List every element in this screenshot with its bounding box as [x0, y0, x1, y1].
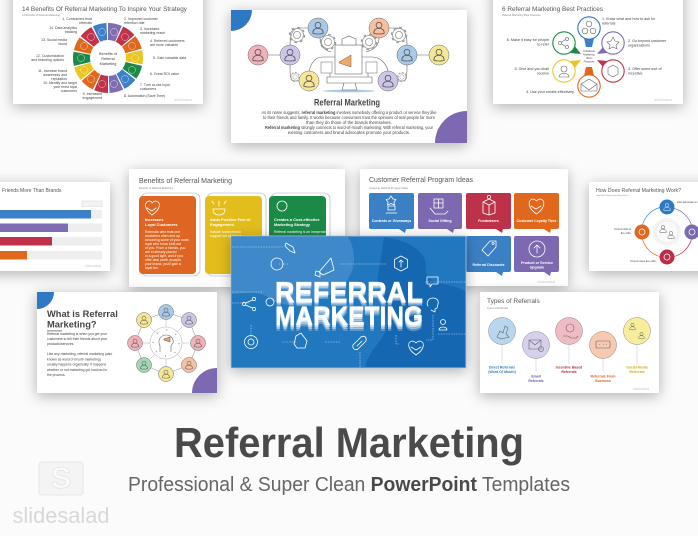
cover title: REFERRAL [275, 277, 423, 309]
logo wordmark: slidesalad [12, 503, 110, 528]
cover title: REFERRAL [275, 278, 423, 310]
wheel labels: reputation [51, 77, 67, 81]
card: loyal customers: Referrals who trust one [145, 230, 180, 234]
slide: 14 benefits wheel: Referral [101, 57, 115, 61]
card: loyal customers: in a good light, and if you [145, 254, 183, 258]
type: direct referrals: Direct Referrals [489, 366, 515, 370]
slide heading: benefits: Benefits of Referral Marketing [139, 176, 232, 185]
card: cost effective: Creates a Cost-effective [274, 217, 320, 222]
slidesalad logo [12, 462, 110, 528]
corner: blue [231, 10, 252, 31]
process labels: the offer [621, 231, 631, 235]
slide heading: 14 benefits: 14 Benefits Of Referral Marketing To Inspire Your Strategy [22, 6, 188, 13]
connector lines [268, 28, 429, 81]
practice labels: receive [537, 72, 549, 76]
idea card: product upgrade: Product or Service [521, 261, 553, 265]
slide: what is referral marketing: Marketing? [47, 320, 97, 330]
practice labels: to refer [537, 42, 550, 46]
idea card: social gifting: Social Gifting [428, 219, 452, 223]
wheel labels: 6. Great ROI value [150, 72, 179, 76]
legend button [82, 201, 102, 206]
type: incentive based referrals: Referrals [561, 370, 577, 374]
slide footer logo: slidesalad [174, 97, 192, 102]
icon: megaphone [315, 258, 334, 277]
card: positive feel of engagement: Adds Positive Feel of [210, 217, 251, 222]
practice labels: 6. Make it easy for people [507, 38, 549, 42]
type: direct referrals: (Word Of Mouth) [488, 370, 516, 374]
practice labels: 1. Know what and how to ask for [602, 17, 656, 21]
central people icon [653, 218, 681, 246]
slide: customer referral program ideas: Customer Referral Program Ideas [369, 186, 409, 190]
wheel labels: referrals [79, 21, 92, 25]
idea card: customer loyalty tiers [514, 193, 559, 233]
stem lines [502, 344, 637, 372]
wheel labels: 13. Social media [41, 38, 67, 42]
wheel labels: are more valuable [150, 43, 178, 47]
body text: Referral marketing strongly connects to word-of-mouth marketing. With referral marketing, your [265, 125, 434, 130]
icon: small gear [266, 298, 274, 306]
body text: usually happens organically. It happens [47, 362, 106, 366]
practice labels: incentive [628, 72, 643, 76]
idea card: fundraisers: Fundraisers [478, 219, 499, 223]
slide: 6 best practices: Practices [584, 60, 595, 64]
wheel labels: marketing reach [140, 31, 165, 35]
idea card: referral discounts: Referral Discounts [473, 263, 504, 267]
wheel labels: boost [58, 42, 67, 46]
cover icon network [232, 243, 466, 368]
slide: friends more than brands bar chart [0, 182, 110, 271]
wheel labels: customers [140, 87, 156, 91]
wheel labels: awareness and [43, 73, 67, 77]
body text [47, 332, 112, 377]
wheel labels: 10. Identify and target [43, 81, 77, 85]
card: positive feel of engagement: Include social media [210, 230, 241, 234]
card: loyal customers: loyal fan. [145, 266, 159, 270]
icon: sparkling bowl [212, 201, 226, 215]
corner: purple [435, 111, 467, 143]
body text: As its name suggests, referral marketing involves somebody offering a product or service they like [262, 110, 437, 115]
benefits wheel [71, 21, 145, 95]
main title: Referral Marketing [174, 419, 524, 466]
icon: hands [294, 333, 307, 348]
card: loyal customers [139, 196, 196, 274]
slide: 14 benefits wheel: Marketing [100, 62, 116, 66]
wheel labels: 5. Gain valuable data [153, 56, 186, 60]
wheel labels: 2. Improved customer [124, 17, 159, 21]
body text: existing customers and brand advocates promote your products. [288, 130, 410, 135]
wheel centre label: Benefits of [99, 52, 118, 56]
bars [0, 210, 91, 260]
wheel labels: retention rate [124, 21, 145, 25]
icon: head gear [271, 258, 283, 270]
type: social media referrals: Referrals [629, 370, 645, 374]
cover title: MARKETING [275, 303, 423, 333]
type: incentive based referrals: Incentive Based [556, 366, 582, 370]
icon: hand coin [277, 201, 287, 211]
icon: open box [394, 256, 408, 271]
process labels: Friend claims [614, 227, 632, 231]
network ring [135, 312, 198, 374]
slide: how does referral marketing work [589, 182, 698, 271]
cover title: MARKETING [275, 301, 423, 331]
wheel labels: 11. Increase brand [38, 69, 67, 73]
type: social media referrals: Social Media [626, 366, 648, 370]
card: loyal customers: Loyal Customers [145, 222, 178, 227]
card: loyal customers: your brand, you'll gain a [145, 262, 181, 266]
slide: benefits of referral marketing cards: Benefits of Referral Marketing [139, 186, 174, 190]
body text: Like any marketing, referral marketing (also [47, 352, 112, 356]
people icons [253, 22, 444, 87]
card outlines [141, 193, 330, 276]
wheel labels: 7. Turn at-risk loyal [140, 83, 170, 87]
slide heading: how: How Does Referral Marketing Work? [596, 188, 681, 194]
body text: products/services. [47, 342, 74, 346]
slide: 14 benefits wheel [13, 0, 203, 104]
practice icons [558, 21, 619, 91]
centre hub [580, 48, 598, 66]
spokes [143, 320, 189, 366]
slide: 6 best practices: Marketing [583, 52, 595, 56]
type: referrals from business: Referrals From [591, 374, 615, 378]
centre cover slide [231, 236, 466, 368]
wheel labels: tracking [65, 30, 77, 34]
wheel labels: customers [61, 89, 77, 93]
slide footer logo: slidesalad [537, 279, 555, 284]
network people icons [131, 308, 202, 378]
practice wedges [570, 38, 607, 76]
icon: person [440, 320, 446, 324]
wheel segment glyphs [78, 28, 138, 88]
card: loyal customers: offer deal worth accepts [145, 258, 181, 262]
type: email referrals [522, 332, 550, 383]
idea card: product upgrade: Upgrade [530, 266, 544, 270]
slide heading: referral marketing: Referral Marketing [314, 98, 380, 108]
icon: share [242, 302, 246, 306]
practice labels: 2. Go beyond customer [628, 39, 667, 43]
body text: to their friends and family. It works because consumers trust the opinions of real people far more [263, 115, 436, 120]
practice labels [507, 17, 667, 94]
cover title [275, 277, 423, 337]
card: positive feel of engagement: support out of strong [210, 234, 241, 238]
type: referrals from business [590, 332, 616, 383]
slide: types of referrals [480, 292, 659, 393]
wheel labels: and branding options [31, 58, 64, 62]
slide heading: what is: What is Referral [47, 309, 118, 319]
idea card: product upgrade [514, 236, 559, 276]
slide footer logo: slidesalad [85, 264, 101, 268]
body text: known as word of mouth marketing) [47, 358, 101, 362]
wheel labels: 14. Data analytics [49, 26, 77, 30]
idea card: fundraisers [466, 193, 511, 233]
card: loyal customers: marketers often end up [145, 234, 180, 238]
type: email referrals: Email [531, 374, 541, 378]
process nodes [634, 200, 698, 264]
slide: referral marketing network [231, 10, 467, 143]
idea card: contests [369, 193, 414, 233]
cover background blobs [232, 237, 465, 367]
idea card: contests: Contests or Giveaways [372, 219, 411, 223]
card: loyal customers: loyal who know best out [145, 242, 181, 246]
card: loyal customers: are in already placed [145, 250, 177, 254]
gears [289, 27, 407, 82]
logo mark [39, 462, 83, 495]
slide footer logo: slidesalad [654, 97, 672, 102]
icon: target [244, 336, 258, 348]
card: cost effective [269, 196, 329, 274]
corner: blue [37, 292, 54, 309]
card: loyal customers: becoming some of your most [145, 238, 189, 242]
body text: whether or not marketing got involved in [47, 368, 107, 372]
card: cost effective: Marketing Strategy [274, 222, 311, 227]
slide: 6 best practices: Best [586, 56, 592, 60]
cover title: REFERRAL [275, 280, 423, 312]
type: social media referrals [624, 318, 650, 374]
icon: heart handshake [409, 341, 423, 355]
slide: how does referral marketing work: How Does Referral Marketing Work? [596, 194, 629, 197]
idea card: customer loyalty tiers: Customer Loyalty Tiers [517, 219, 556, 223]
icon: chat bubble [427, 277, 438, 287]
wheel labels: 8. Automation (Save Time) [124, 94, 165, 98]
body text: the process. [47, 373, 66, 377]
idea card: social gifting [418, 193, 462, 233]
slide heading: program ideas: Customer Referral Program Ideas [369, 175, 473, 184]
wheel labels: engagement [83, 96, 102, 100]
body text: customers to tell their friends about your [47, 337, 108, 341]
wheel labels: 12. Customization [36, 54, 64, 58]
card: loyal customers: Increases [145, 217, 164, 222]
wheel labels [31, 17, 186, 100]
practice labels: organizations [628, 44, 650, 48]
wheel labels: your most loyal [53, 85, 77, 89]
network people [248, 18, 449, 91]
practice circles [553, 17, 624, 97]
cover title: REFERRAL [275, 281, 423, 313]
icon: heart handshake [146, 201, 159, 215]
icon: chain link [353, 336, 366, 350]
body text: than they do those of the brands themselves. [306, 120, 392, 125]
icon: medal [285, 243, 295, 253]
megaphone head icon [159, 335, 173, 352]
card: loyal customers: of you. From a friends, you [145, 246, 185, 250]
type: email referrals: Referrals [528, 379, 544, 383]
slide: 6 best practices: Referral Marketing Best Practices [502, 13, 541, 17]
slide heading: friends: Friends More Than Brands [2, 188, 62, 194]
slidesalad logo: S [51, 462, 71, 495]
monitor with megaphone [321, 36, 377, 92]
network nodes [128, 304, 206, 382]
corner: purple [192, 368, 217, 393]
wheel labels: 4. Referred customers [150, 39, 185, 43]
slide heading: best practices: 6 Referral Marketing Best Practices [502, 6, 604, 13]
subtitle: Professional & Super Clean PowerPoint Templates [128, 474, 570, 496]
practice labels: 5. Give and you shall [515, 67, 549, 71]
wheel labels: 9. Increased [83, 92, 102, 96]
practice labels: referrals [602, 22, 616, 26]
wheel labels: 1. Consumers trust [62, 17, 92, 21]
card: cost effective: Referral marketing is an inexpensive [274, 230, 329, 234]
type: referrals from business: Business [595, 379, 611, 383]
cover title: MARKETING [275, 305, 423, 335]
body text: Referral marketing is when you get your [47, 332, 108, 336]
process labels: Friend uses the offer [630, 259, 656, 263]
process labels [614, 200, 698, 263]
type: incentive based referrals [556, 318, 582, 374]
slide: types of referrals: Types of Referrals [487, 306, 509, 310]
wheel labels: 3. Increased [140, 27, 159, 31]
process ring [642, 207, 692, 257]
slide heading: types: Types of Referrals [487, 298, 540, 305]
practice labels: 3. Offer some sort of [628, 67, 663, 71]
icon: head with headset [427, 298, 438, 312]
idea card: referral discounts [466, 236, 511, 276]
bar tracks [0, 210, 102, 260]
card: positive feel of engagement: Engagement [210, 222, 235, 227]
slide: customer referral program ideas [360, 169, 568, 286]
body text [262, 110, 437, 135]
slide: 6 best practices [493, 0, 683, 104]
cover title: MARKETING [275, 307, 423, 337]
card: positive feel of engagement [205, 196, 262, 274]
slide: 6 best practices: 6 Referral [583, 49, 595, 53]
slide: what is referral marketing [37, 292, 217, 393]
slide footer logo: slidesalad [633, 387, 649, 391]
slide: 14 benefits wheel: 14 Benefits of Referral Marketing [22, 13, 60, 17]
type: direct referrals [488, 318, 516, 374]
practice labels: 4. Use your emails effectively [526, 90, 574, 94]
slide: benefits of referral marketing cards [129, 169, 345, 287]
